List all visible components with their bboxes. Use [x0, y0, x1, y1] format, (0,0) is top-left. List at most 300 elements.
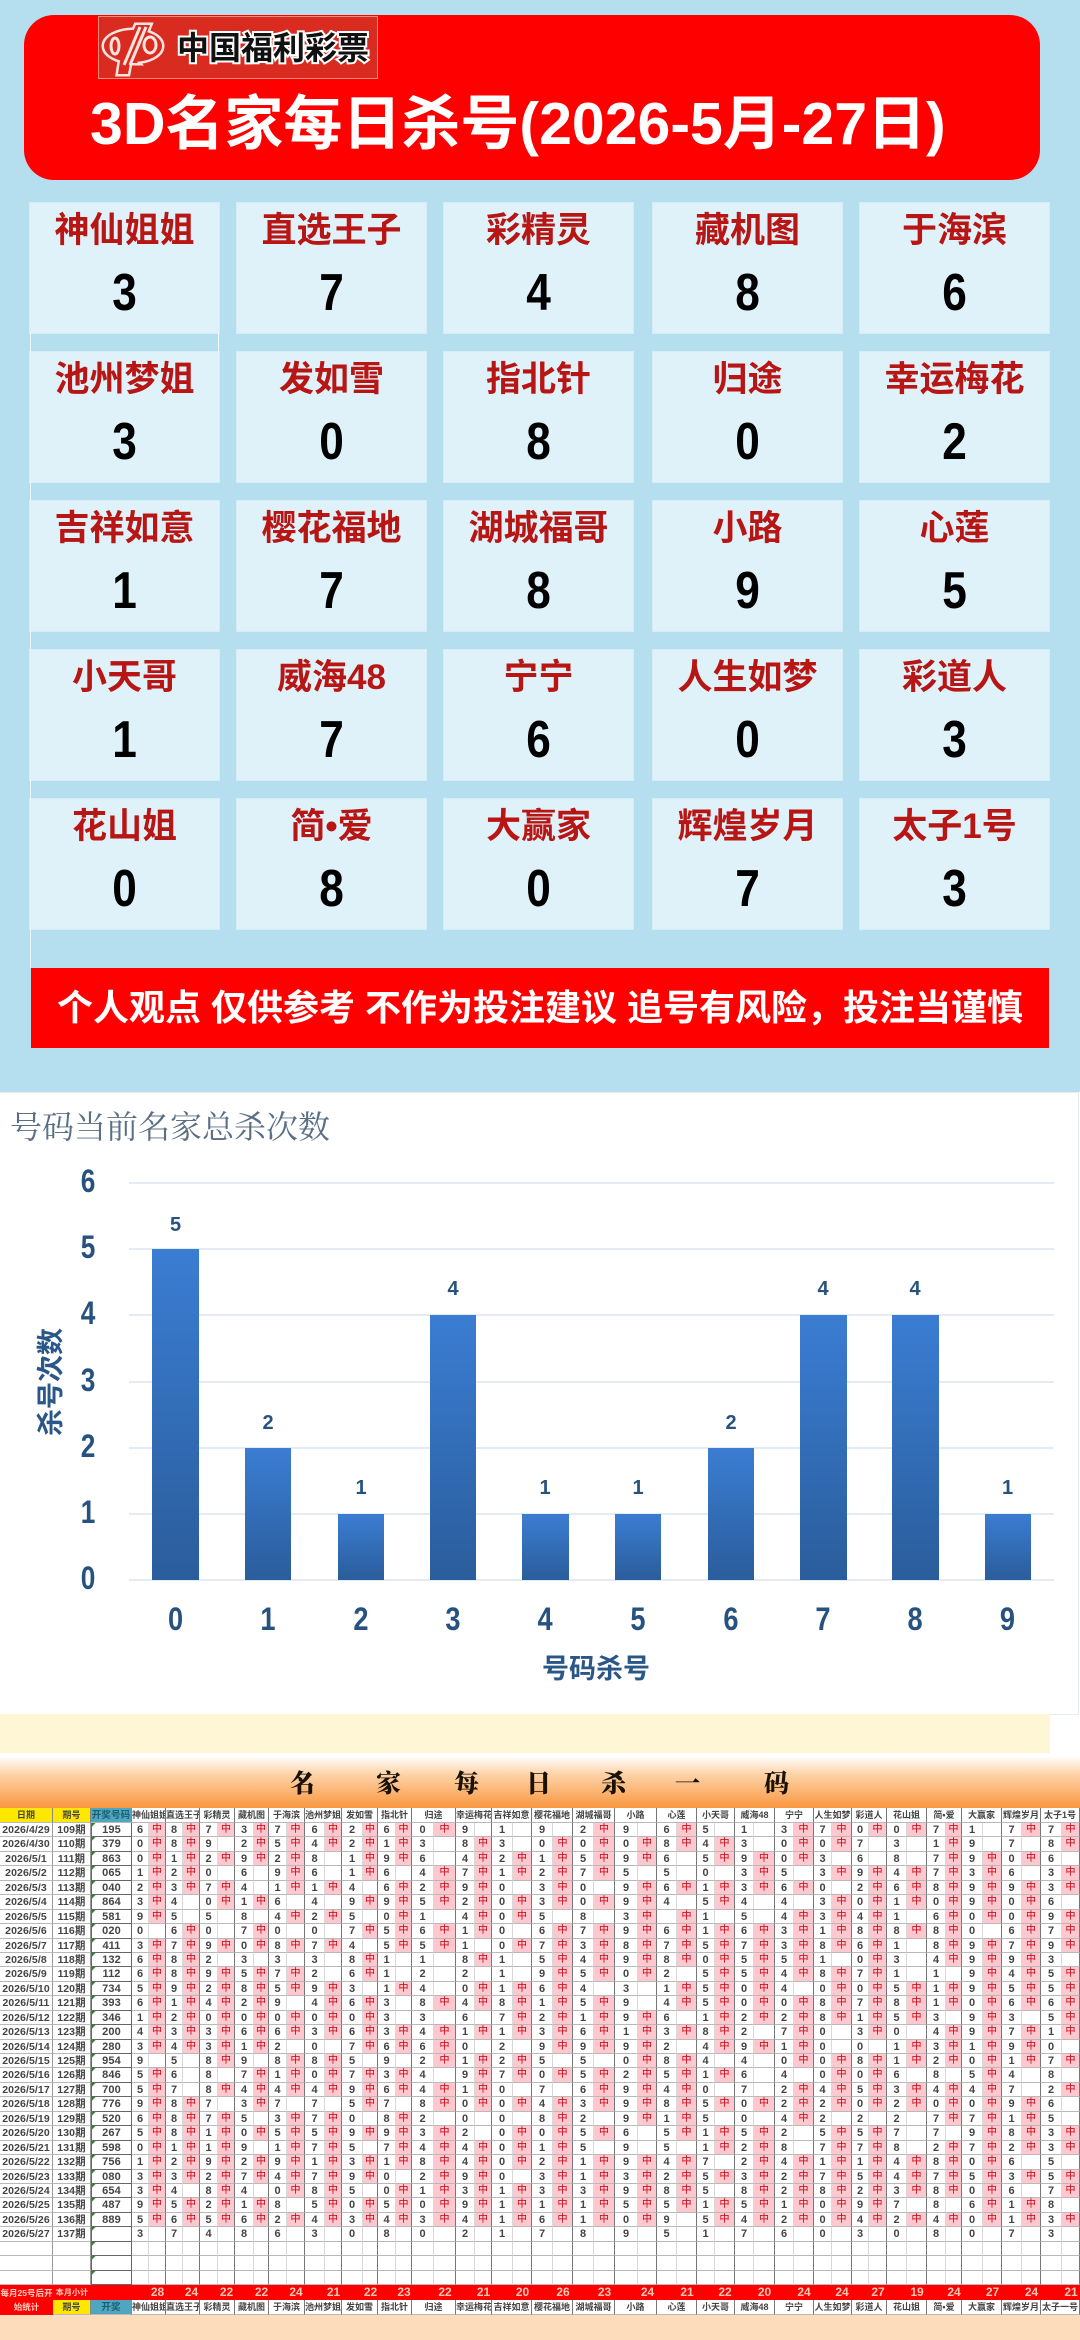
row 112: 4: [419, 1867, 426, 1879]
row 116: 6: [663, 1925, 670, 1937]
row 110: 0: [539, 1838, 545, 1850]
row 126: 中: [720, 2069, 730, 2080]
logo text: 中国福利彩票: [177, 30, 369, 66]
row 128: 中: [365, 2098, 375, 2109]
row 128: 7: [274, 2098, 281, 2110]
row 120: 9: [171, 1983, 177, 1995]
row 109: 6: [383, 1824, 390, 1836]
row 134: 0: [383, 2185, 390, 2197]
row 122: 3: [933, 2012, 939, 2024]
row 132: 中: [948, 2156, 958, 2167]
row 136: 中: [186, 2214, 196, 2225]
row 125: 1: [462, 2055, 468, 2067]
row 137: 7: [1008, 2228, 1015, 2240]
row 129: 5: [702, 2113, 709, 2125]
row 120: 5: [1048, 1983, 1054, 1995]
card: 吉祥如意: 吉祥如意: [54, 509, 194, 548]
row 137: 1: [499, 2228, 505, 2240]
row 121: 121期: [57, 1997, 86, 2009]
row 111: 中: [290, 1853, 300, 1864]
row 116: 7: [241, 1925, 247, 1937]
row 137: 6: [781, 2228, 787, 2240]
row 124: 中: [798, 2041, 808, 2052]
card: 指北针: [444, 352, 633, 482]
row 124: 中: [398, 2041, 408, 2052]
row 131: 3: [1048, 2142, 1054, 2154]
row 112: 2026/5/2: [5, 1867, 47, 1879]
row 130: 中: [440, 2127, 450, 2138]
row 109: 0: [893, 1824, 900, 1836]
row 120: 中: [186, 1983, 196, 1994]
row 123: 123期: [57, 2026, 86, 2038]
row 133: 中: [987, 2170, 997, 2182]
row 122: 7: [499, 2012, 505, 2024]
row 122: 5: [1048, 2012, 1054, 2024]
row 119: 中: [798, 1968, 808, 1979]
row 123: 0: [819, 2026, 826, 2038]
row 123: 中: [152, 2026, 162, 2037]
bottom header row: 指北针: [381, 2302, 408, 2312]
row 110: 1: [383, 1838, 390, 1850]
monthly subtotal row: 19: [910, 2285, 924, 2299]
row 121: 0: [741, 1997, 747, 2009]
row 117: 中: [599, 1940, 609, 1950]
row 136: 中: [948, 2214, 958, 2225]
row 111: 中: [478, 1853, 488, 1864]
row 115: 5: [171, 1911, 177, 1923]
row 123: 中: [987, 2026, 997, 2037]
row 117: 8: [623, 1940, 629, 1952]
row 111: 6: [419, 1853, 426, 1865]
row 122: 中: [558, 2012, 568, 2023]
row 134: 4: [171, 2185, 177, 2197]
row 109: 109期: [57, 1824, 86, 1836]
row 110: 中: [836, 1838, 846, 1849]
row 113: 中: [328, 1882, 338, 1893]
card: 太子1号: 3: [942, 860, 967, 918]
row 111: 8: [893, 1853, 900, 1865]
row 114: 864: [102, 1896, 121, 1908]
row 129: 3: [274, 2113, 281, 2125]
row 125: 中: [478, 2055, 488, 2066]
row 134: 中: [798, 2185, 808, 2196]
row 109: 7: [1008, 1824, 1015, 1836]
row 133: 5: [1048, 2170, 1054, 2182]
row 125: 1: [1008, 2055, 1015, 2067]
row 120: 中: [558, 1983, 568, 1994]
row 112: 6: [383, 1867, 390, 1879]
row 123: 中: [186, 2026, 196, 2037]
row 109: 中: [398, 1824, 408, 1835]
row 126: [0, 2068, 1080, 2083]
row 117: 3: [781, 1940, 787, 1952]
row 119: 中: [720, 1968, 730, 1979]
row 131: 中: [328, 2142, 338, 2153]
row 111: 中: [720, 1853, 730, 1864]
row 112: 3: [741, 1867, 747, 1879]
row 124: 中: [256, 2041, 266, 2052]
row 119: 中: [1066, 1968, 1076, 1979]
row 118: 8: [663, 1954, 670, 1966]
row 135: 中: [478, 2199, 488, 2210]
row 126: 6: [741, 2069, 747, 2081]
row 119: 中: [365, 1968, 375, 1979]
card: 归途: [653, 352, 842, 482]
row 124: 3: [933, 2041, 939, 2053]
row 116: 中: [599, 1925, 609, 1936]
row 132: 4: [893, 2156, 900, 2168]
card: 简·爱: 简•爱: [290, 807, 373, 846]
row 117: 0: [499, 1940, 505, 1952]
monthly subtotal row: 22: [364, 2285, 377, 2299]
row 111: 6: [663, 1853, 670, 1865]
row 137: 1: [702, 2228, 709, 2240]
row 124: 2: [274, 2041, 281, 2053]
row 116: 中: [798, 1925, 808, 1936]
row 109: 中: [912, 1824, 922, 1835]
row 112: 5: [623, 1867, 629, 1879]
row 128: 0: [857, 2098, 863, 2110]
row 123: 200: [102, 2026, 121, 2038]
row 118: 0: [857, 1954, 863, 1966]
monthly subtotal row: 23: [397, 2285, 411, 2299]
row 128: 中: [872, 2098, 882, 2109]
row 119: 5: [241, 1968, 247, 1980]
row 131: 5: [580, 2142, 586, 2154]
row 110: [0, 1837, 1080, 1852]
y-axis labels: 2: [81, 1430, 95, 1465]
row 127: 中: [365, 2084, 375, 2095]
row 110: 0: [819, 1838, 826, 1850]
monthly subtotal row: 21: [327, 2285, 340, 2299]
row 113: 中: [398, 1882, 408, 1893]
row 109: 0: [419, 1824, 426, 1836]
row 121: 中: [798, 1997, 808, 2008]
row 132: 132期: [57, 2156, 86, 2168]
row 111: 中: [256, 1853, 266, 1864]
row 112: 3: [1048, 1867, 1054, 1879]
row 127: 中: [478, 2084, 488, 2095]
row 121: 中: [759, 1997, 769, 2008]
y-axis labels: 1: [81, 1496, 95, 1531]
row 130: 中: [1026, 2127, 1036, 2138]
row 134: 6: [1008, 2185, 1015, 2197]
row 110: 7: [857, 1838, 863, 1850]
row 119: 5: [741, 1968, 747, 1980]
row 121: 3: [383, 1997, 390, 2009]
row 111: 中: [186, 1853, 196, 1864]
row 133: 中: [872, 2170, 882, 2182]
row 114: 0: [1008, 1896, 1015, 1908]
row 110: 中: [328, 1838, 338, 1849]
row 111: 中: [1026, 1853, 1036, 1864]
row 133: 中: [599, 2170, 609, 2182]
row 132: 4: [781, 2156, 787, 2168]
row 111: [0, 1852, 1080, 1866]
row 118: 132: [102, 1954, 121, 1966]
row 125: 7: [1048, 2055, 1054, 2067]
row 116: 0: [499, 1925, 505, 1937]
row 125: 0: [623, 2055, 629, 2067]
row 136: 中: [642, 2214, 652, 2225]
row 131: 8: [781, 2142, 787, 2154]
row 134: 8: [205, 2185, 212, 2197]
bottom header row: 太子一号: [1042, 2302, 1078, 2312]
row 122: 中: [798, 2012, 808, 2023]
row 110: 4: [311, 1838, 318, 1850]
row 130: 9: [383, 2127, 390, 2139]
row 124: 中: [365, 2041, 375, 2052]
row 122: 1: [857, 2012, 863, 2024]
row 119: 7: [274, 1968, 281, 1980]
row 125: 1: [893, 2055, 900, 2067]
row 115: 4: [781, 1911, 787, 1923]
y-axis labels: [81, 1165, 96, 1597]
row 126: 中: [682, 2069, 692, 2080]
row 123: 中: [599, 2026, 609, 2037]
row 120: 0: [819, 1983, 826, 1995]
row 115: 3: [819, 1911, 826, 1923]
row 117: 7: [1008, 1940, 1015, 1952]
row 123: 2026/5/13: [2, 2026, 50, 2038]
table header row: 威海48: [740, 1810, 768, 1820]
row 120: 中: [398, 1983, 408, 1994]
row 129: 中: [328, 2113, 338, 2124]
monthly subtotal row: 24: [185, 2285, 198, 2299]
row 114: 4: [663, 1896, 670, 1908]
row 110: 中: [720, 1838, 730, 1849]
row 133: 3: [623, 2170, 629, 2182]
row 122: 中: [987, 2012, 997, 2023]
row 122: 3: [1008, 2012, 1015, 2024]
row 126: 中: [642, 2069, 652, 2080]
row 132: 中: [186, 2156, 196, 2167]
row 127: 4: [241, 2084, 247, 2096]
row 122: 中: [256, 2012, 266, 2023]
row 125: 2: [419, 2055, 426, 2067]
row 117: 中: [290, 1940, 300, 1950]
blank row 1: [0, 2242, 1080, 2256]
row 120: 中: [912, 1983, 922, 1994]
row 113: 3: [539, 1882, 545, 1894]
row 132: 4: [663, 2156, 670, 2168]
row 132: 中: [798, 2156, 808, 2167]
pale yellow strip: [0, 1714, 1050, 1753]
table header row: 归途: [424, 1810, 442, 1820]
row 114: 中: [398, 1896, 408, 1907]
card: 吉祥如意: [30, 501, 219, 631]
row 109: 2026/4/29: [2, 1824, 50, 1836]
row 117: 中: [221, 1940, 231, 1950]
row 134: 8: [311, 2185, 318, 2197]
bottom header row: 彩精灵: [203, 2302, 230, 2312]
row 109: 中: [290, 1824, 300, 1835]
y-axis title: 杀号次数: [36, 1328, 66, 1436]
row 132: 5: [1048, 2156, 1054, 2168]
row 133: 中: [642, 2170, 652, 2182]
row 117: 9: [205, 1940, 212, 1952]
row 129: 7: [933, 2113, 939, 2125]
row 135: 5: [311, 2199, 318, 2211]
row 123: 3: [857, 2026, 863, 2038]
row 111: 9: [241, 1853, 247, 1865]
row 116: 中: [440, 1925, 450, 1936]
bottom header row: 归途: [424, 2302, 442, 2312]
row 127: 中: [152, 2084, 162, 2095]
row 123: 1: [623, 2026, 629, 2038]
card: 发如雪: 发如雪: [279, 360, 384, 399]
row 133: 中: [912, 2170, 922, 2182]
row 120: 5: [893, 1983, 900, 1995]
row 122: 6: [663, 2012, 670, 2024]
row 116: 8: [857, 1925, 863, 1937]
row 127: 8: [205, 2084, 212, 2096]
row 117: 7: [741, 1940, 747, 1952]
row 126: 8: [1048, 2069, 1054, 2081]
row 121: 9: [274, 1997, 281, 2009]
row 112: 中: [759, 1867, 769, 1878]
row 131: 中: [1026, 2142, 1036, 2153]
x-axis labels: 4: [537, 1602, 553, 1638]
bottom header row: 吉祥如意: [493, 2302, 530, 2312]
row 136: 0: [819, 2214, 826, 2226]
bottom header row: 花山姐: [893, 2302, 920, 2312]
row 111: 2026/5/1: [5, 1853, 47, 1865]
card: 樱花福地: 樱花福地: [261, 509, 402, 548]
row 117: 中: [517, 1940, 527, 1950]
bottom header row: 简•爱: [933, 2302, 955, 2312]
row 132: 1: [383, 2156, 390, 2168]
row 124: 中: [558, 2041, 568, 2052]
table header row: 开奖号码: [92, 1810, 130, 1821]
row 125: 8: [311, 2055, 318, 2067]
row 115: [0, 1910, 1080, 1924]
row 129: 8: [539, 2113, 545, 2125]
x-axis labels: 3: [445, 1602, 461, 1638]
row 133: 0: [499, 2170, 505, 2182]
row 124: 9: [1008, 2041, 1015, 2053]
row 113: 中: [912, 1882, 922, 1893]
row 115: 中: [798, 1911, 808, 1922]
row 122: 2: [171, 2012, 177, 2024]
monthly subtotal row: 本月小计: [56, 2288, 88, 2297]
bottom header row: 威海48: [740, 2302, 768, 2312]
row 113: 中: [798, 1882, 808, 1893]
table title band: 码: [764, 1771, 789, 1798]
row 130: 5: [741, 2127, 747, 2139]
row 136: 5: [702, 2214, 709, 2226]
row 122: 中: [365, 2012, 375, 2023]
card: 湖城福哥: [444, 501, 633, 631]
row 127: 4: [274, 2084, 281, 2096]
row 129: 中: [290, 2113, 300, 2124]
row 125: 4: [741, 2055, 747, 2067]
value labels: 4: [909, 1278, 921, 1300]
row 119: 中: [221, 1968, 231, 1979]
row 121: 6: [1048, 1997, 1054, 2009]
row 130: 中: [987, 2127, 997, 2138]
row 109: [0, 1823, 1080, 1837]
row 127: 7: [741, 2084, 747, 2096]
monthly subtotal row: 23: [598, 2285, 611, 2299]
row 131: 中: [517, 2142, 527, 2153]
row 136: 9: [663, 2214, 670, 2226]
row 126: 中: [872, 2069, 882, 2080]
row 113: 9: [969, 1882, 975, 1894]
row 115: 中: [1066, 1911, 1076, 1922]
row 123: [0, 2025, 1080, 2040]
row 114: 2026/5/4: [5, 1896, 47, 1908]
row 125: 0: [781, 2055, 787, 2067]
row 134: 中: [682, 2185, 692, 2196]
row 134: 0: [969, 2185, 975, 2197]
row 121: 393: [102, 1997, 121, 2009]
row 131: 2: [933, 2142, 939, 2154]
row 114: 9: [349, 1896, 355, 1908]
row 119: 中: [290, 1968, 300, 1979]
row 110: 5: [274, 1838, 281, 1850]
row 128: 中: [558, 2098, 568, 2109]
row 109: 7: [274, 1824, 281, 1836]
row 125: 中: [872, 2055, 882, 2066]
row 118: 3: [241, 1954, 247, 1966]
card: 花山姐: [30, 799, 219, 929]
row 137: 9: [623, 2228, 629, 2240]
row 116: 中: [948, 1925, 958, 1936]
row 118: 3: [274, 1954, 281, 1966]
row 130: 1: [205, 2127, 212, 2139]
row 127: 2026/5/17: [2, 2084, 50, 2096]
table header row: 辉煌岁月: [1003, 1810, 1039, 1820]
row 110: 3: [741, 1838, 747, 1850]
row 126: 2026/5/16: [2, 2069, 50, 2081]
row 119: 中: [836, 1968, 846, 1979]
row 126: 中: [365, 2069, 375, 2080]
row 134: [0, 2184, 1080, 2198]
row 129: 2026/5/19: [2, 2113, 50, 2125]
row 118: 中: [759, 1954, 769, 1965]
card: 心莲: 心莲: [919, 509, 990, 548]
row 132: 中: [478, 2156, 488, 2167]
row 133: 5: [702, 2170, 709, 2182]
row 120: 2: [205, 1983, 212, 1995]
row 114: 0: [857, 1896, 863, 1908]
row 123: 中: [517, 2026, 527, 2037]
row 135: 487: [102, 2199, 121, 2211]
row 115: 中: [948, 1911, 958, 1922]
row 136: [0, 2213, 1080, 2227]
row 126: 9: [462, 2069, 468, 2081]
row 120: 中: [152, 1983, 162, 1994]
row 113: 1: [274, 1882, 281, 1894]
row 117: 7: [663, 1940, 670, 1952]
row 121: [0, 1996, 1080, 2011]
row 111: 1: [171, 1853, 177, 1865]
row 125: 8: [857, 2055, 863, 2067]
row 110: 2: [349, 1838, 355, 1850]
row 114: 中: [152, 1896, 162, 1907]
row 123: 3: [205, 2026, 212, 2038]
row 126: 0: [311, 2069, 318, 2081]
card: 神仙姐姐: [30, 203, 219, 333]
row 131: 1: [274, 2142, 281, 2154]
monthly subtotal row: 24: [797, 2285, 811, 2299]
row 136: 中: [836, 2214, 846, 2225]
row 115: 中: [836, 1911, 846, 1922]
row 121: 中: [872, 1997, 882, 2008]
row 127: 0: [499, 2084, 505, 2096]
row 119: 4: [781, 1968, 787, 1980]
